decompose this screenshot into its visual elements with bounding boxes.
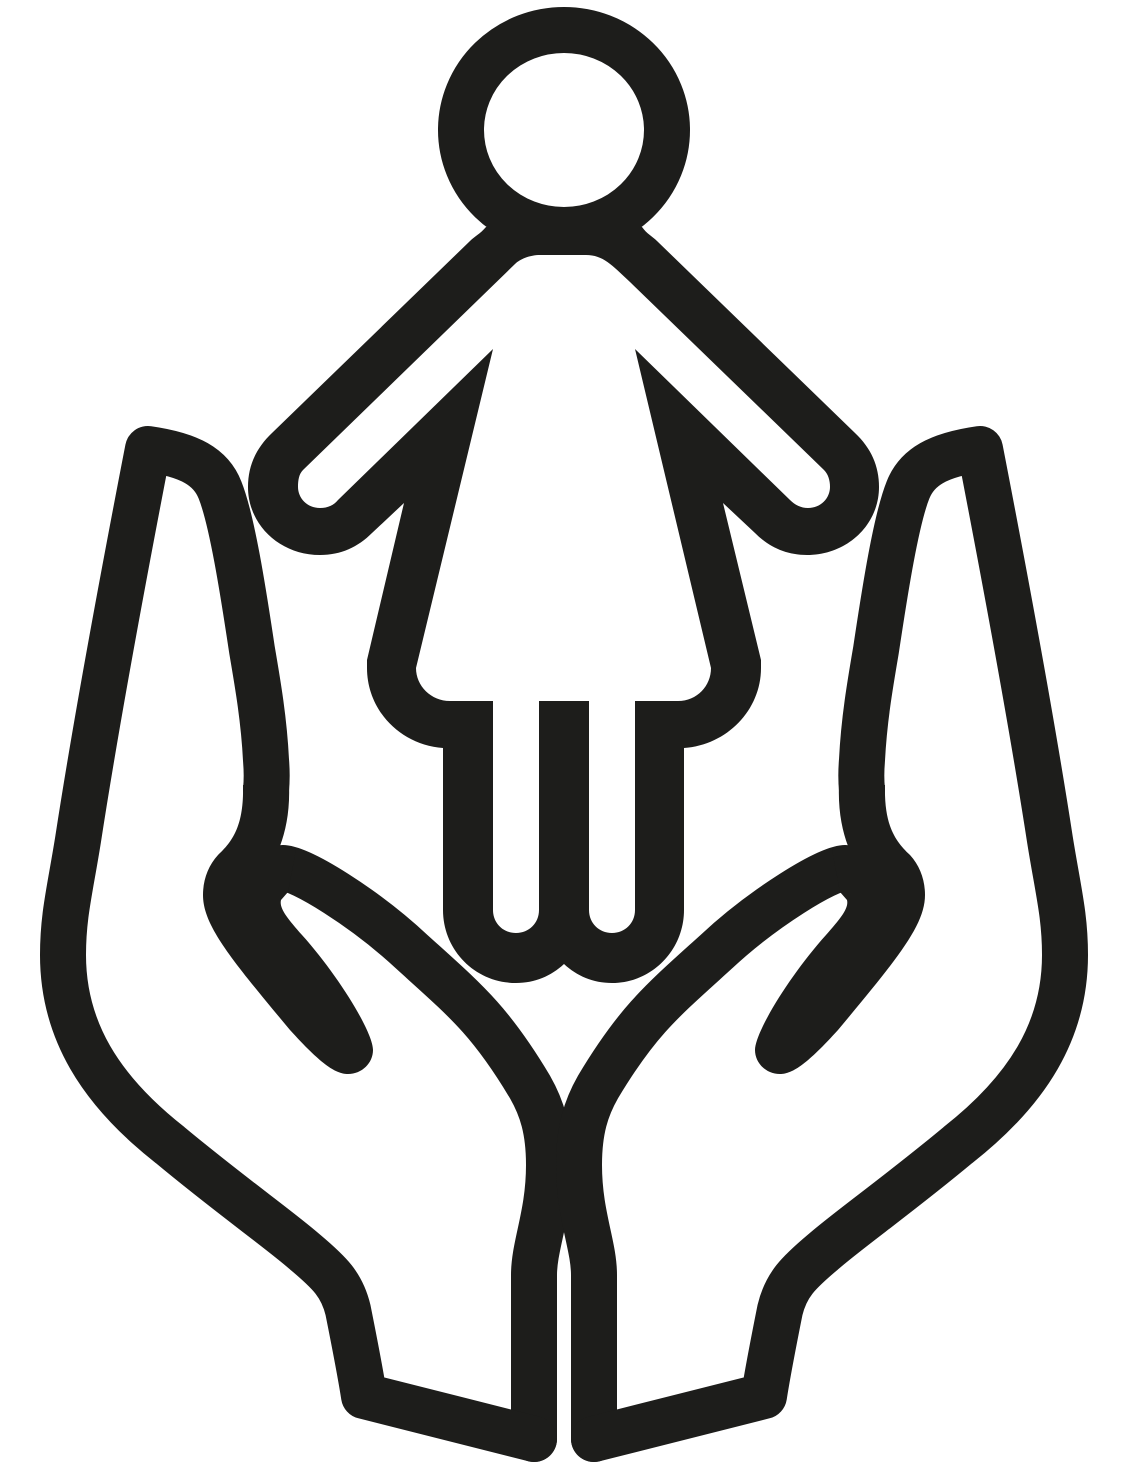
icon: left hand [63, 449, 549, 1439]
icon: right hand [579, 449, 1065, 1439]
icon: person body in dress [248, 227, 879, 983]
icon: person head [461, 30, 667, 230]
